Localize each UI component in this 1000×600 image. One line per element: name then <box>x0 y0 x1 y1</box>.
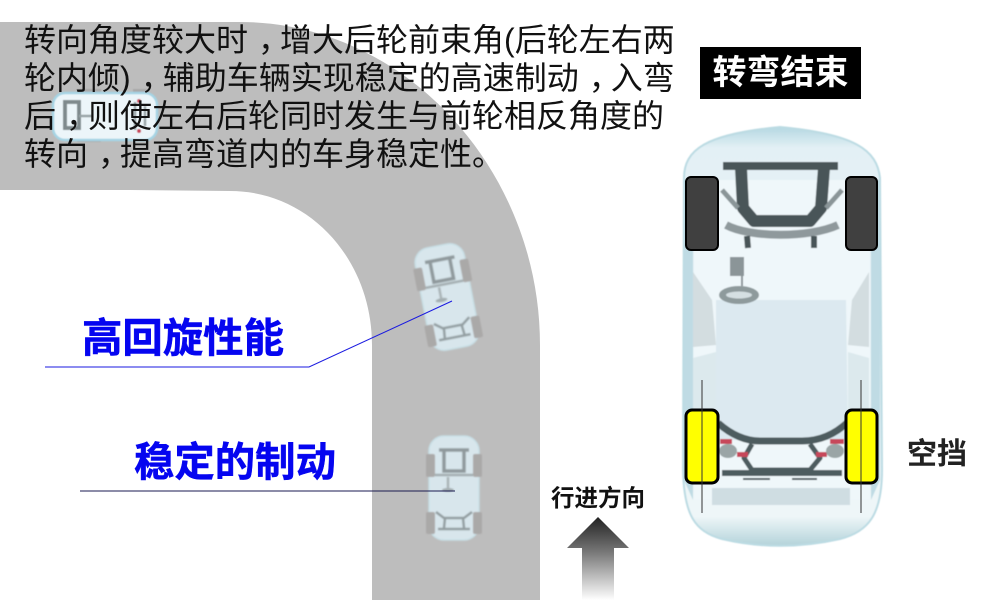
description text: 转向角度较大时 ，增大后轮前束角(后轮左右两 <box>24 22 675 58</box>
label: stable braking: 稳定的制动 <box>134 439 336 485</box>
description text: 轮内倾) ，辅助车辆实现稳定的高速制动 ，入弯 <box>24 60 675 96</box>
road curve <box>0 22 540 600</box>
label: neutral: 空挡 <box>907 438 967 471</box>
large car top view <box>683 127 882 546</box>
rear left axis line <box>701 380 703 513</box>
car at top of road <box>53 89 157 142</box>
leader line: stable braking <box>80 490 455 492</box>
description text: 转向 ，提高弯道内的车身稳定性。 <box>24 136 504 172</box>
description text <box>24 22 675 172</box>
label: direction of travel: 行进方向 <box>551 485 645 511</box>
title badge: 转弯结束 <box>712 54 848 92</box>
rear left wheel <box>686 410 718 483</box>
title badge <box>700 47 861 99</box>
car mid-turn <box>410 241 484 353</box>
rear right wheel <box>846 410 877 483</box>
rear right axis line <box>860 380 862 513</box>
front right wheel <box>846 177 877 250</box>
direction arrow <box>567 517 629 600</box>
front subframe <box>722 166 842 248</box>
front left wheel <box>686 177 718 250</box>
car on straight <box>426 436 482 540</box>
description text: 后 ，则使左右后轮同时发生与前轮相反角度的 <box>24 98 664 134</box>
leader line: high agility <box>45 301 452 367</box>
steering assembly <box>719 257 759 304</box>
car body <box>683 127 882 546</box>
rear subframe <box>718 422 848 479</box>
label: high agility: 高回旋性能 <box>82 315 284 361</box>
